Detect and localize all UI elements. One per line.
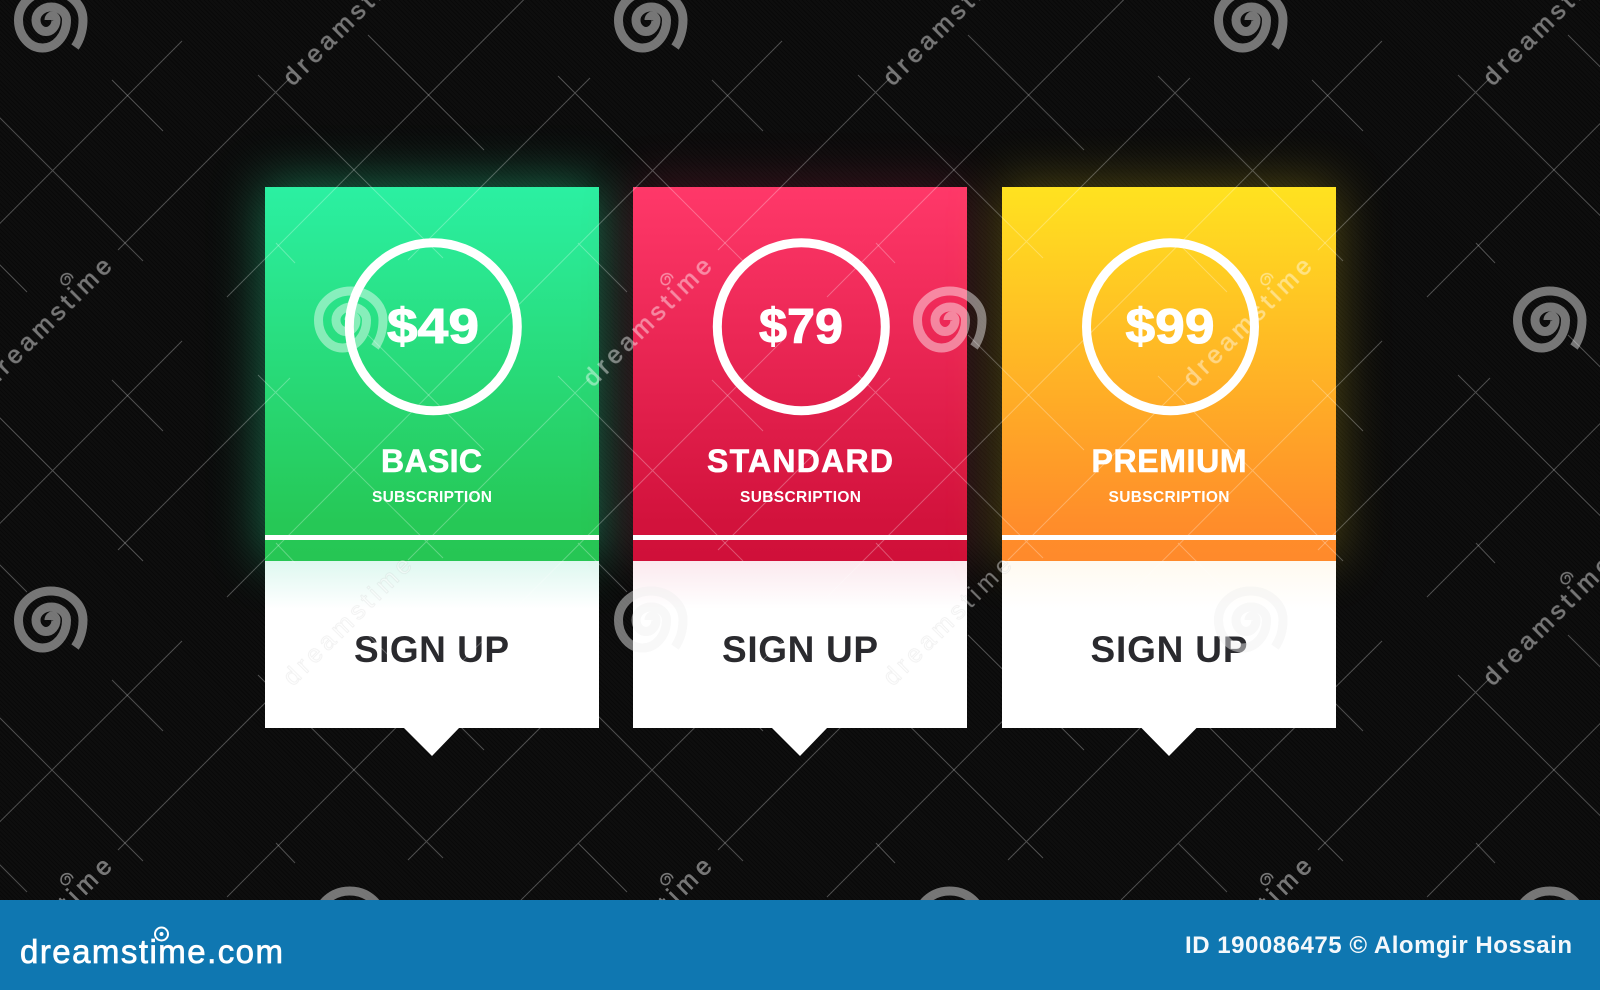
price circle bbox=[717, 243, 885, 411]
footer logo: dreamstime.com bbox=[20, 933, 283, 970]
premium plan content bbox=[1082, 238, 1259, 756]
price: $99 bbox=[1125, 300, 1214, 354]
divider line bbox=[633, 535, 967, 540]
sign up panel bbox=[633, 561, 967, 728]
subscription label: SUBSCRIPTION bbox=[1108, 489, 1229, 506]
sign up label: SIGN UP bbox=[354, 629, 509, 670]
sign up panel bbox=[265, 561, 599, 728]
price circle bbox=[1086, 243, 1254, 411]
sign up panel bbox=[1002, 561, 1336, 728]
watermark text: dreamstime bbox=[877, 551, 1017, 691]
pointer bbox=[771, 727, 828, 756]
plan name: STANDARD bbox=[707, 443, 893, 479]
sign up label: SIGN UP bbox=[722, 629, 878, 670]
price: $49 bbox=[387, 300, 479, 354]
watermark text: dreamstime bbox=[1177, 252, 1317, 392]
watermark text: dreamstime bbox=[577, 252, 717, 392]
pointer bbox=[1140, 727, 1197, 756]
panel: standard plan bbox=[610, 162, 990, 756]
pointer bbox=[403, 727, 460, 756]
red price band bbox=[633, 187, 967, 561]
panel: basic plan bbox=[230, 150, 632, 756]
watermark text: dreamstime bbox=[277, 551, 417, 691]
divider line bbox=[265, 535, 599, 540]
green price band bbox=[265, 187, 599, 561]
plan name: BASIC bbox=[381, 443, 482, 479]
footer bar bbox=[0, 900, 1600, 990]
divider line bbox=[1002, 535, 1336, 540]
basic plan content bbox=[344, 238, 522, 756]
orange price band bbox=[1002, 187, 1336, 561]
price circle bbox=[349, 243, 517, 411]
image id and credit: ID 190086475 © Alomgir Hossain bbox=[1185, 932, 1572, 959]
plan name: PREMIUM bbox=[1091, 443, 1246, 479]
subscription label: SUBSCRIPTION bbox=[740, 489, 861, 506]
subscription label: SUBSCRIPTION bbox=[372, 489, 492, 506]
panel: premium plan bbox=[974, 156, 1364, 756]
price: $79 bbox=[759, 300, 843, 354]
sign up label: SIGN UP bbox=[1090, 629, 1247, 670]
standard plan content bbox=[707, 238, 893, 756]
